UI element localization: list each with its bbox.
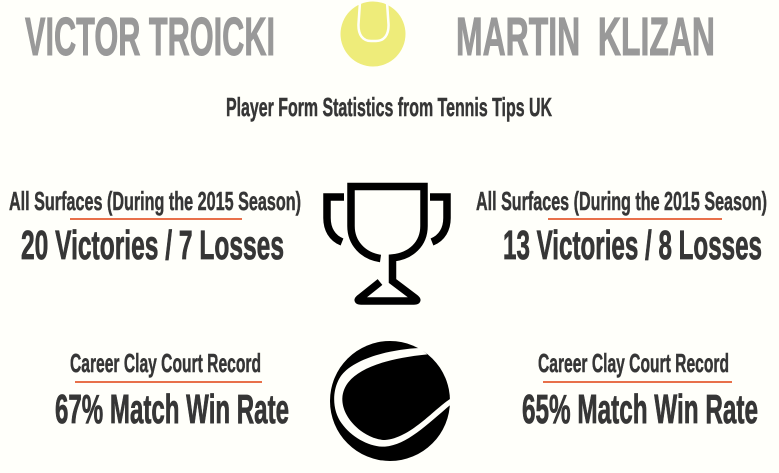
- underline clay left: [75, 381, 262, 383]
- panel: Klizan clay record: [522, 348, 758, 432]
- underline right: [548, 218, 722, 220]
- label: all surfaces left: All Surfaces (During the 2015 Season): [9, 186, 301, 216]
- icon: black tennis ball: [330, 341, 451, 461]
- panel: Troicki season record: [9, 186, 301, 268]
- underline clay right: [543, 381, 732, 383]
- panel: Klizan season record: [476, 186, 767, 268]
- heading: Victor Troicki: VICTOR TROICKI: [25, 7, 275, 67]
- icon: trophy: [327, 186, 447, 301]
- stat: Troicki victories: 20 Victories / 7 Losses: [21, 222, 284, 268]
- icon: yellow tennis ball: [340, 2, 406, 66]
- label: career clay left: Career Clay Court Record: [70, 348, 261, 378]
- subtitle: Player Form Statistics from Tennis Tips UK: [226, 92, 552, 122]
- panel: Troicki clay record: [55, 348, 289, 432]
- stat: Troicki win rate: 67% Match Win Rate: [55, 386, 289, 432]
- underline left: [70, 218, 242, 220]
